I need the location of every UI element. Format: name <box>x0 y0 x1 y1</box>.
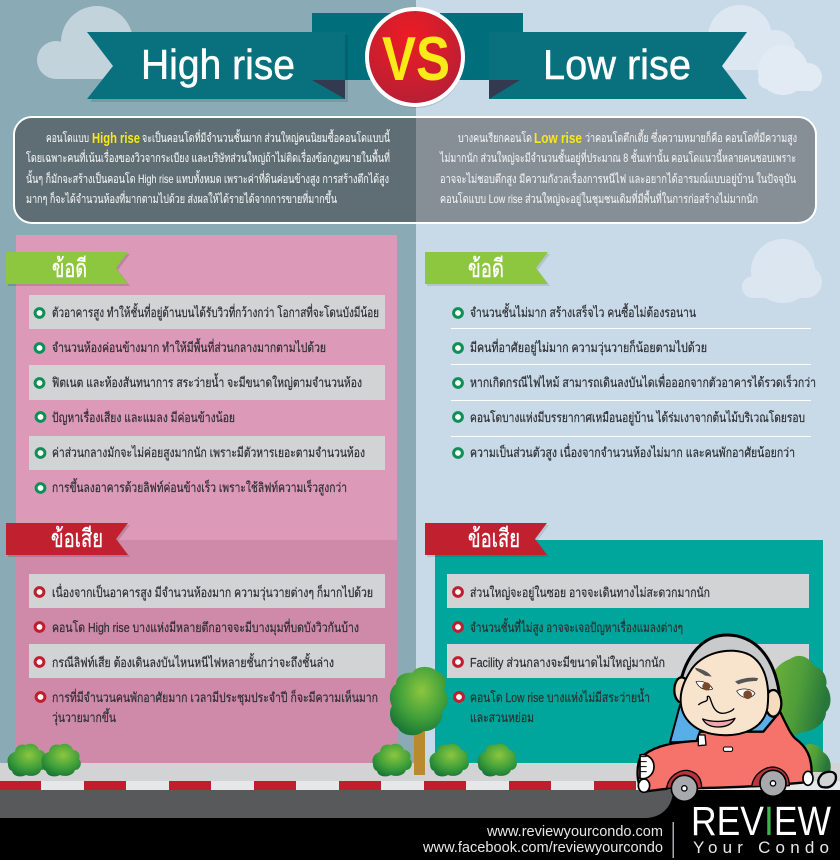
sidewalk and road <box>0 763 840 860</box>
footer: website links: www.reviewyourcondo.com <box>486 823 663 840</box>
banner: low rise cons <box>425 523 549 557</box>
list: low rise cons: Facility ส่วนกลางจะมีขนาดไม่ใหญ่มากนัก <box>470 655 665 670</box>
character in red car <box>638 635 836 801</box>
title ribbon: low rise: Low rise <box>543 41 691 88</box>
bush: right behind car <box>802 744 831 772</box>
banner: low rise pros <box>425 252 550 286</box>
list: high rise cons: กรณีลิฟท์เสีย ต้องเดินลงบันไหนหนีไฟหลายชั้นกว่าจะถึงชั้นล่าง <box>52 653 334 670</box>
intro panel: low rise <box>416 117 816 223</box>
list: high rise pros: ปัญหาเรื่องเสียง และแมลง มีค่อนข้างน้อย <box>52 409 235 425</box>
list: high rise pros: ฟิตเนต และห้องสันทนาการ สระว่ายน้ำ จะมีขนาดใหญ่ตามจำนวนห้อง <box>52 373 362 390</box>
list: high rise cons: วุ่นวายมากขึ้น <box>52 708 116 726</box>
panel: high rise cons background <box>16 540 397 765</box>
intro panel: high rise: จะเป็นคอนโดที่มีจำนวนชั้นมาก ส่วนใหญ่คนนิยมซื้อคอนโดแบบนี้ <box>142 129 390 145</box>
list: high rise cons: การที่มีจำนวนคนพักอาศัยมาก เวลามีประชุมประจำปี ก็จะมีความเห็นมาก <box>52 688 378 706</box>
intro panel: low rise: Low rise <box>534 130 582 147</box>
title ribbon: high rise <box>87 13 402 102</box>
list: low rise pros: มีคนที่อาศัยอยู่ไม่มาก ความวุ่นวายก็น้อยตามไปด้วย <box>470 338 707 356</box>
title ribbon: high rise: High rise <box>141 41 295 88</box>
banner: low rise cons: ข้อเสีย <box>468 525 520 553</box>
banner: high rise cons <box>6 523 130 557</box>
list: low rise pros <box>451 303 816 461</box>
list: high rise pros: ค่าส่วนกลางมักจะไม่ค่อยสูงมากนัก เพราะมีตัวหารเยอะตามจำนวนห้อง <box>52 445 365 461</box>
footer: website links <box>422 823 663 856</box>
list: high rise pros: ตัวอาคารสูง ทำให้ชั้นที่อยู่ด้านบนได้รับวิวที่กว้างกว่า โอกาสที่จะโดนบังมีน้อย <box>52 303 379 321</box>
list: low rise pros: จำนวนชั้นไม่มาก สร้างเสร็จไว คนซื้อไม่ต้องรอนาน <box>470 303 696 320</box>
intro panel: high rise: โดยเฉพาะคนที่เน้นเรื่องของวิวจากระเบียง และบริษัทส่วนใหญ่ถ้าไม่ติดเรื่องข้อกฎหมายในพื้นที่ <box>26 149 390 165</box>
logo: Review Your Condo: REVIEW <box>691 798 831 844</box>
background: high rise side <box>0 0 416 860</box>
list: low rise cons: จำนวนชั้นที่ไม่สูง อาจจะเจอปัญหาเรื่องแมลงต่างๆ <box>470 618 683 636</box>
list: high rise cons: เนื่องจากเป็นอาคารสูง มีจำนวนห้องมาก ความวุ่นวายต่างๆ ก็มากไปด้วย <box>52 583 373 601</box>
cloud: right middle <box>742 239 822 303</box>
bushes along the sidewalk <box>7 744 517 776</box>
list: low rise cons: คอนโด Low rise บางแห่งไม่มีสระว่ายน้ำ <box>470 688 650 705</box>
footer: website links: www.facebook.com/reviewyourcondo <box>422 839 663 856</box>
list: high rise pros: จำนวนห้องค่อนข้างมาก ทำให้มีพื้นที่ส่วนกลางมากตามไปด้วย <box>52 338 326 355</box>
list: low rise cons <box>447 574 809 725</box>
footer divider <box>672 822 674 858</box>
tree: centre <box>390 667 448 775</box>
banner: high rise pros: ข้อดี <box>52 255 87 283</box>
banner: high rise pros <box>6 252 130 286</box>
intro panel: high rise: คอนโดแบบ <box>46 131 89 145</box>
cloud: top left <box>37 6 133 79</box>
list: low rise cons: ส่วนใหญ่จะอยู่ในซอย อาจจะเดินทางไม่สะดวกมากนัก <box>470 585 710 601</box>
logo: Review Your Condo: Your Condo <box>693 838 829 857</box>
background: low rise side <box>416 0 840 860</box>
intro panel: high rise: High rise <box>92 130 140 147</box>
intro panel: high rise <box>14 117 416 223</box>
list: high rise cons <box>29 574 385 726</box>
panel: high rise pros background <box>16 235 397 540</box>
VS badge <box>367 9 464 108</box>
intro panel: high rise: มากๆ ก็จะได้จำนวนห้องที่มากตามไปด้วย ส่งผลให้ได้รายได้จากการขายที่มากขึ้น <box>26 190 337 206</box>
list: high rise pros <box>29 295 385 496</box>
intro panel: high rise: นั้นๆ ก็มักจะสร้างเป็นคอนโด High rise แทบทั้งหมด เพราะค่าที่ดินค่อนข้างสูง การสร้างตึกได้สูง <box>26 170 389 187</box>
list: low rise cons: และสวนหย่อม <box>470 710 534 725</box>
banner: low rise pros: ข้อดี <box>468 255 504 283</box>
list: high rise pros: การขึ้นลงอาคารด้วยลิฟท์ค่อนข้างเร็ว เพราะใช้ลิฟท์ความเร็วสูงกว่า <box>52 478 347 496</box>
intro panel: low rise: บางคนเรียกคอนโด <box>458 131 532 145</box>
VS badge: VS <box>382 25 450 94</box>
clouds: top right <box>708 5 822 95</box>
banner: high rise cons: ข้อเสีย <box>51 525 103 553</box>
tree: right behind car <box>770 656 830 735</box>
list: high rise cons: คอนโด High rise บางแห่งมีหลายตึกอาจจะมีบางมุมที่บดบังวิวกันบ้าง <box>52 619 359 636</box>
title ribbon: low rise <box>440 13 747 99</box>
panel: low rise cons background <box>435 540 823 765</box>
